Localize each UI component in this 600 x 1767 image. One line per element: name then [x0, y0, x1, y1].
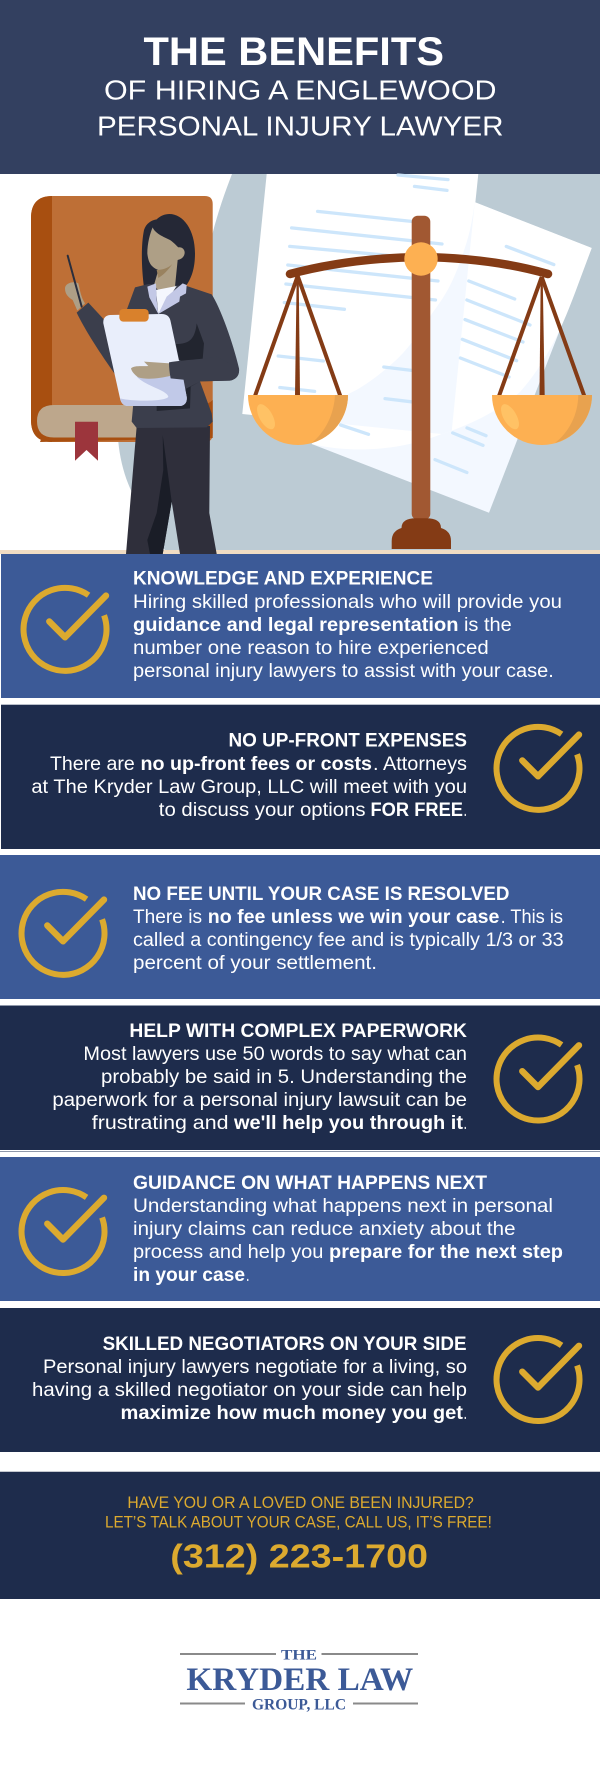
upper body: [65, 214, 239, 428]
phone number: (312) 223-1700: [170, 1538, 428, 1575]
heading: NO FEE UNTIL YOUR CASE IS RESOLVED: [133, 884, 509, 905]
panel: no fee until your case is resolved: [0, 855, 600, 999]
call to action band: [0, 1471, 600, 1599]
forearm: [169, 357, 239, 381]
logo: The Kryder Law Group, LLC: THE: [281, 1648, 317, 1664]
body text: process and help you: [133, 1242, 323, 1263]
bookmark: [75, 422, 98, 461]
body text: percent of your settlement.: [133, 953, 377, 974]
illustration: lawyer, book, documents and scales: [0, 174, 600, 554]
body text: FOR FREE: [370, 800, 463, 821]
icon: check circle: [22, 892, 105, 975]
body text: no fee unless we win your case: [208, 907, 499, 928]
body text: personal injury lawyers to assist with your case.: [133, 661, 554, 682]
body text: prepare for the next step: [329, 1242, 563, 1263]
title: THE BENEFITS: [144, 30, 444, 74]
body text: injury claims can reduce anxiety about the: [133, 1219, 516, 1240]
body text: .: [246, 1265, 250, 1286]
body text: Understanding what happens next in personal: [133, 1196, 553, 1217]
body text: maximize how much money you get: [120, 1403, 464, 1424]
body text: .: [464, 1403, 467, 1424]
header banner: [0, 0, 600, 174]
call to action text: HAVE YOU OR A LOVED ONE BEEN INJURED?: [127, 1494, 474, 1512]
logo: The Kryder Law Group, LLC: KRYDER LAW: [186, 1662, 413, 1698]
body text: paperwork for a personal injury lawsuit can be: [52, 1090, 467, 1111]
body text: Hiring skilled professionals who will provide you: [133, 592, 562, 613]
shirt and collar: [156, 286, 177, 314]
title: PERSONAL INJURY LAWYER: [97, 110, 504, 142]
icon: check circle: [497, 1038, 580, 1121]
background blob: [118, 174, 600, 550]
body text: [32, 1357, 467, 1424]
body text: [52, 1044, 467, 1134]
pants: [126, 426, 217, 554]
panel: skilled negotiators on your side: [0, 1308, 600, 1452]
body text: .: [464, 1113, 467, 1134]
floor line: [0, 550, 600, 554]
logo: The Kryder Law Group, LLC: [180, 1648, 418, 1713]
body text: Most lawyers use 50 words to say what can: [83, 1044, 467, 1065]
document sheets: [242, 174, 592, 513]
heading: HELP WITH COMPLEX PAPERWORK: [129, 1021, 467, 1042]
title: [97, 30, 504, 142]
call to action text: LET’S TALK ABOUT YOUR CASE, CALL US, IT’S FREE!: [105, 1513, 492, 1531]
body text: [133, 907, 564, 974]
clipboard: [103, 314, 187, 406]
scales of justice: [248, 216, 592, 549]
body text: frustrating and: [92, 1113, 228, 1134]
body text: we'll help you through it: [233, 1113, 464, 1134]
lawyer figure: [65, 214, 239, 554]
hand on clipboard: [131, 362, 170, 379]
icon: check circle: [497, 1338, 580, 1421]
jacket: [127, 284, 239, 428]
heading: NO UP-FRONT EXPENSES: [228, 731, 467, 752]
body text: probably be said in 5. Understanding the: [101, 1067, 467, 1088]
body text: .: [464, 800, 467, 821]
body text: . Attorneys: [373, 754, 467, 775]
body text: There are: [50, 754, 135, 775]
panel: guidance on what happens next: [0, 1151, 600, 1301]
book: [31, 196, 213, 461]
left pan: [248, 395, 348, 445]
body text: Personal injury lawyers negotiate for a living, so: [43, 1357, 467, 1378]
title: OF HIRING A ENGLEWOOD: [104, 74, 496, 106]
panel: no up-front expenses: [1, 704, 600, 849]
icon: check circle: [24, 588, 107, 671]
heading: GUIDANCE ON WHAT HAPPENS NEXT: [133, 1173, 487, 1194]
body text: [133, 592, 562, 682]
right pan: [492, 395, 592, 445]
face and neck: [147, 227, 185, 297]
body text: called a contingency fee and is typically 1/3 or 33: [133, 930, 564, 951]
icon: check circle: [497, 727, 580, 810]
hair: [142, 214, 195, 287]
body text: [31, 754, 467, 821]
body text: [133, 1196, 563, 1286]
left arm sleeve: [77, 303, 117, 377]
heading: SKILLED NEGOTIATORS ON YOUR SIDE: [103, 1334, 466, 1355]
raised hand and pointer: [65, 282, 85, 311]
body text: no up-front fees or costs: [140, 754, 372, 775]
body text: guidance and legal representation: [133, 615, 458, 636]
icon: check circle: [22, 1190, 105, 1273]
heading: KNOWLEDGE AND EXPERIENCE: [133, 568, 433, 590]
call to action text: [105, 1494, 492, 1531]
body text: There is: [133, 907, 202, 928]
body text: to discuss your options: [159, 800, 366, 821]
panel: help with complex paperwork: [0, 1005, 600, 1150]
body text: number one reason to hire experienced: [133, 638, 489, 659]
body text: is the: [464, 615, 512, 636]
body text: having a skilled negotiator on your side can help: [32, 1380, 467, 1401]
panel: knowledge and experience: [1, 554, 600, 698]
body text: in your case: [133, 1265, 245, 1286]
body text: at The Kryder Law Group, LLC will meet with you: [31, 777, 467, 798]
logo: The Kryder Law Group, LLC: GROUP, LLC: [252, 1696, 346, 1713]
body text: . This is: [501, 907, 563, 928]
